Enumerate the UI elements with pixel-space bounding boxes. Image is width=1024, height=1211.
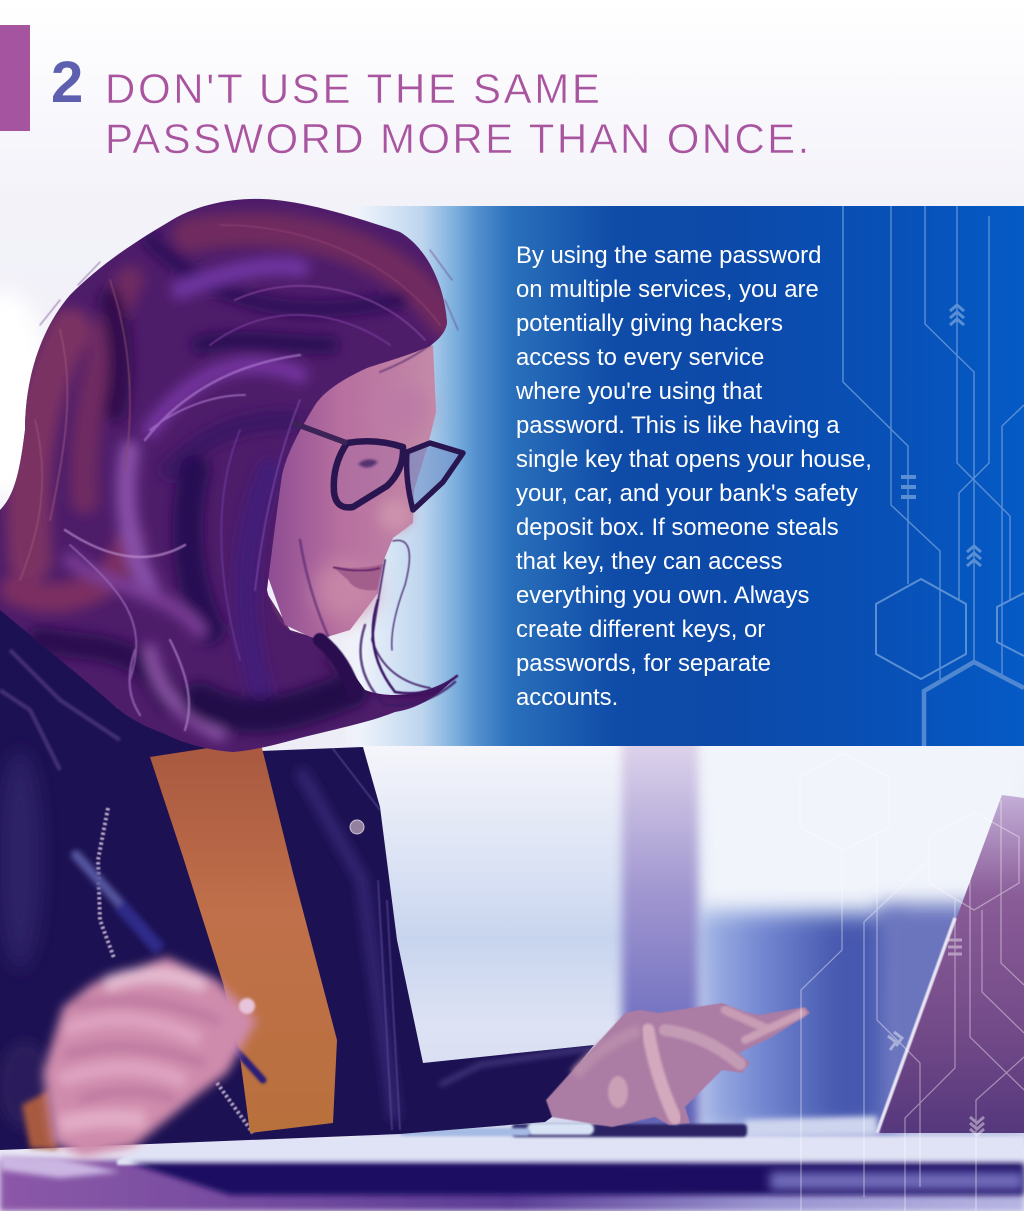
typing hand bbox=[546, 1003, 810, 1127]
broad locks bbox=[15, 229, 450, 735]
body text: where you're using that bbox=[516, 378, 762, 405]
glasses bbox=[293, 423, 463, 510]
step number: 2 bbox=[51, 50, 83, 115]
front hair strands bbox=[40, 250, 458, 705]
circuit pattern on blue panel bbox=[843, 206, 1024, 746]
forearm skin bbox=[22, 1090, 58, 1150]
body text: that key, they can access bbox=[516, 548, 782, 575]
body text: accounts. bbox=[516, 684, 618, 711]
body text: create different keys, or bbox=[516, 616, 765, 643]
body text: on multiple services, you are bbox=[516, 276, 819, 303]
title bbox=[105, 65, 812, 162]
body text: everything you own. Always bbox=[516, 582, 809, 609]
body text: passwords, for separate bbox=[516, 650, 771, 677]
body text: single key that opens your house, bbox=[516, 446, 872, 473]
table and folder bbox=[0, 1116, 1024, 1211]
body text: By using the same password bbox=[516, 242, 821, 269]
pen bbox=[76, 855, 160, 950]
zipper bbox=[98, 808, 253, 1133]
title: PASSWORD MORE THAN ONCE. bbox=[105, 115, 812, 162]
white glow behind hair bbox=[0, 290, 50, 500]
body text: password. This is like having a bbox=[516, 412, 840, 439]
shirt bbox=[150, 740, 337, 1133]
face bbox=[262, 345, 436, 640]
blurred office background bbox=[360, 735, 1024, 1146]
blue panel bbox=[340, 206, 1024, 746]
body text bbox=[516, 242, 872, 711]
body text: your, car, and your bank's safety bbox=[516, 480, 858, 507]
writing hand bbox=[43, 957, 257, 1157]
cheek highlight bbox=[313, 560, 377, 620]
neck bbox=[220, 590, 323, 740]
title: DON'T USE THE SAME bbox=[105, 65, 603, 112]
body text: potentially giving hackers bbox=[516, 310, 783, 337]
eye bbox=[358, 459, 378, 468]
title accent bar bbox=[0, 25, 30, 131]
ring highlight bbox=[239, 998, 255, 1014]
body text: deposit box. If someone steals bbox=[516, 514, 839, 541]
fine strands bbox=[20, 225, 440, 730]
lips bbox=[333, 564, 383, 590]
jacket button bbox=[350, 820, 364, 834]
woman bbox=[0, 190, 810, 1160]
laptop bbox=[877, 795, 1024, 1133]
jacket bbox=[0, 590, 600, 1160]
pen tip bbox=[233, 1047, 263, 1080]
circuit pattern lower right bbox=[800, 753, 1024, 1211]
body text: access to every service bbox=[516, 344, 764, 371]
hair bbox=[0, 190, 470, 760]
